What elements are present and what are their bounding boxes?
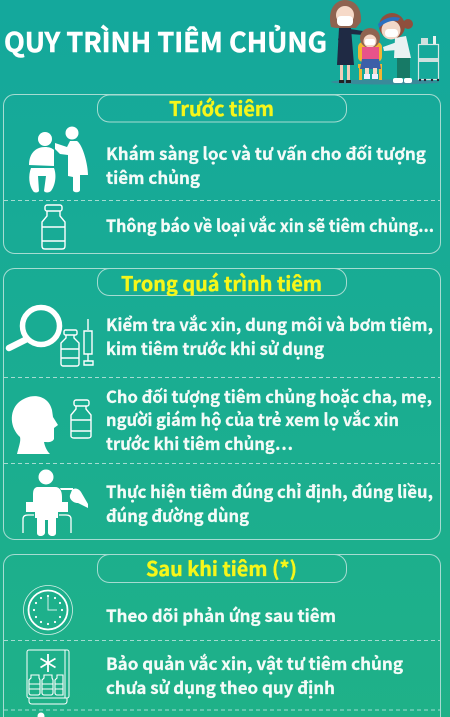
icon: vaccine vial [42, 205, 65, 249]
heading: during injection: Trong quá trình tiêm [121, 268, 322, 297]
text: correct dose: Thực hiện tiêm đúng chỉ định, đúng liều, [106, 478, 433, 503]
icon: magnifier with vial and syringe [9, 308, 93, 366]
panel: after injection [4, 553, 440, 717]
icon: partial head at bottom [38, 712, 44, 717]
text: monitor reactions: Theo dõi phản ứng sau tiêm [106, 602, 336, 627]
text: screening: Khám sàng lọc và tư vấn cho đối tượng [106, 140, 426, 165]
text: screening line 2: tiêm chủng [106, 164, 200, 189]
text: show vial line 3: trước khi tiêm chủng… [106, 430, 293, 455]
icon: seated person receiving injection [23, 470, 88, 536]
text: show vial line 2: người giám hộ của trẻ xem lọ vắc xin [106, 406, 399, 431]
icon: doctor examining patient [29, 126, 88, 192]
text: storage: Bảo quản vắc xin, vật tư tiêm chủng [106, 650, 403, 675]
text: check vaccine line 2: kim tiêm trước khi sử dụng [106, 335, 324, 360]
icon: head looking at vial [12, 396, 91, 454]
heading: after injection: Sau khi tiêm (*) [146, 553, 297, 582]
panel: during injection [4, 268, 440, 540]
icon: vaccine refrigerator [27, 650, 69, 704]
text: show vial: Cho đối tượng tiêm chủng hoặc cha, mẹ, [106, 383, 432, 408]
text: check vaccine: Kiểm tra vắc xin, dung môi và bơm tiêm, [106, 311, 433, 336]
icon: clock [24, 586, 72, 634]
text: storage line 2: chưa sử dụng theo quy định [106, 674, 335, 699]
text: vaccine notice: Thông báo về loại vắc xin sẽ tiêm chủng... [106, 212, 434, 237]
heading: before injection: Trước tiêm [169, 93, 274, 122]
title: QUY TRÌNH TIÊM CHỦNG [4, 21, 327, 60]
illustration: family and nurse vaccination [330, 0, 439, 84]
text: correct dose line 2: đúng đường dùng [106, 502, 249, 527]
panel: before injection [4, 93, 440, 254]
